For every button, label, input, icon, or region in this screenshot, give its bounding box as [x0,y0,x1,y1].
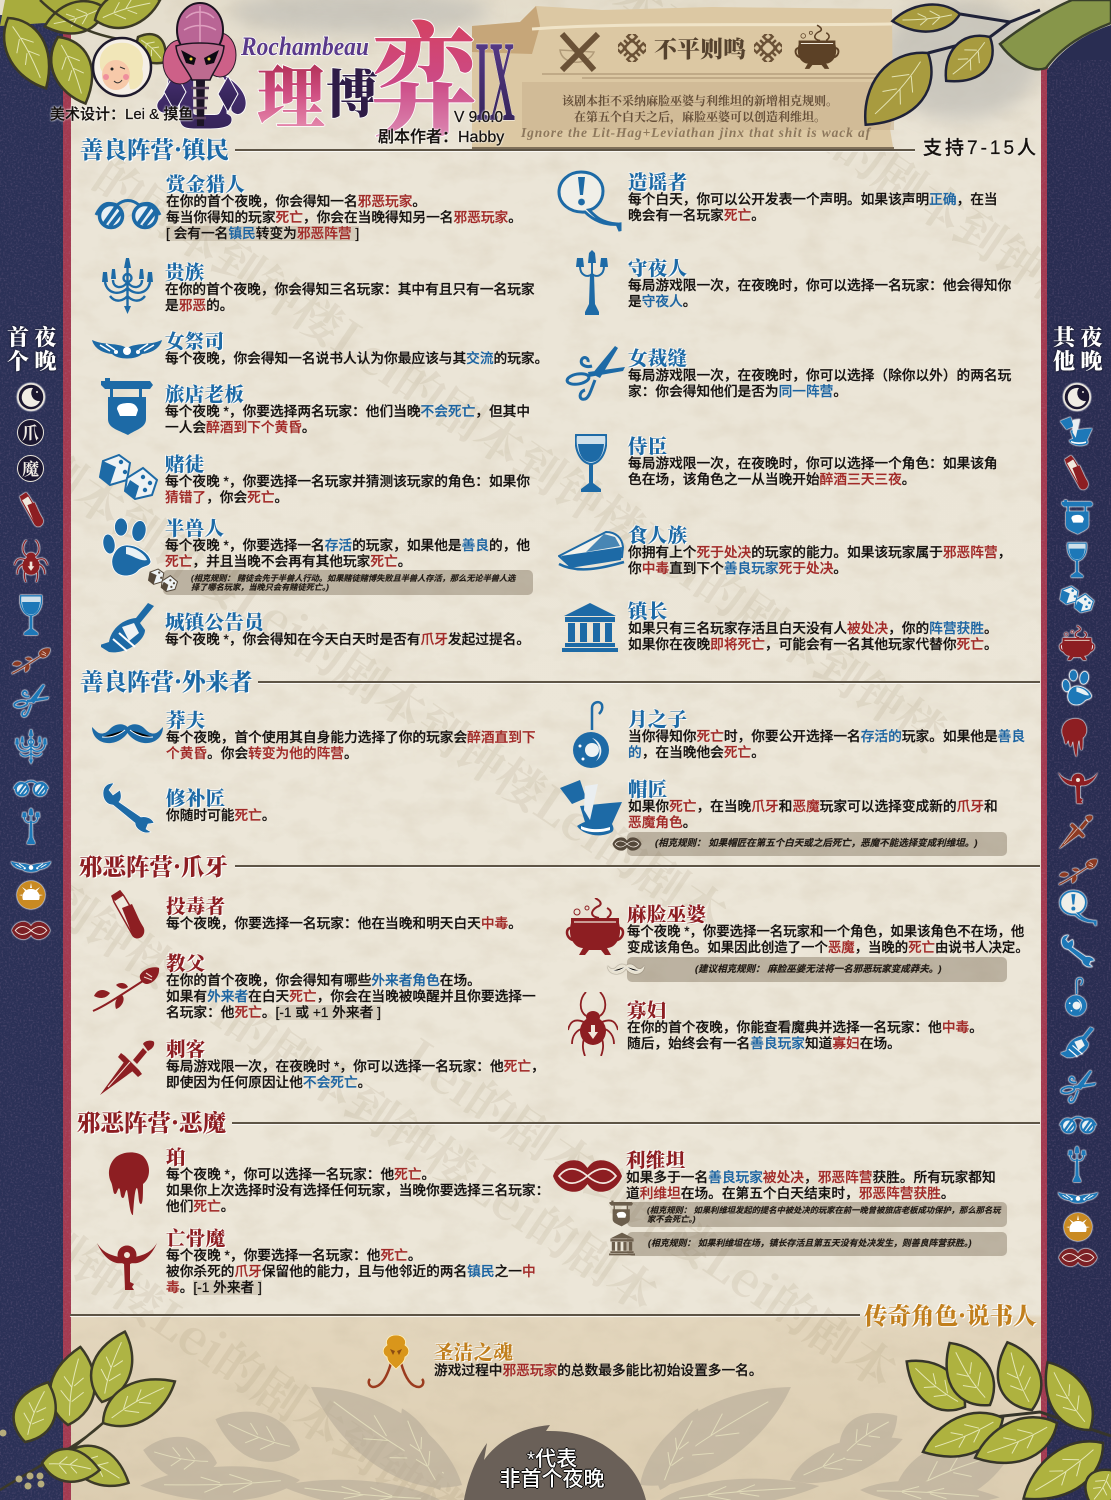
role text [166,896,522,932]
section heading: demons: 邪恶阵营·恶魔 [77,1104,226,1138]
role text: 修补匠 [166,783,225,811]
role text: 城镇公告员 [165,607,264,635]
role: 帽匠 [560,779,1010,857]
icon: winged skull key [97,1235,157,1290]
role text [628,436,998,488]
role: 教父 [92,953,537,1021]
role text: 如果只有三名玩家存活且白天没有人被处决，你的阵营获胜。 [628,621,998,636]
role text [628,258,1011,310]
role text: 贵族 [165,257,205,285]
player count: 支持7-15人 [923,138,1039,159]
icon: designer avatar [92,36,152,98]
role text: 每个夜晚，你会得知一名说书人认为你最应该与其交流的玩家。 [165,351,548,366]
credit: script author: 剧本作者：Habby [378,129,504,146]
role: 女裁缝 [565,346,1020,402]
icon: winged band [92,340,162,358]
minion token [17,419,44,446]
role text: 猜错了，你会死亡。 [165,490,288,505]
role: 利维坦 [553,1150,1008,1258]
icon: vial [110,890,147,940]
text: IX [475,18,515,146]
logo: Rochambeau title [155,0,515,160]
role text [627,904,1029,956]
role: 守夜人 [574,250,1014,315]
role text [166,1147,549,1215]
role text: 半兽人 [165,513,224,541]
role text: 是邪恶的。 [165,298,233,313]
role text [165,518,530,570]
role text: 每个夜晚 *，你要选择两名玩家：他们当晚不会死亡，但其中 [165,404,530,419]
role: 城镇公告员 [101,603,541,655]
role text: 你中毒直到下个善良玩家死于处决。 [628,561,847,576]
moon token [17,383,45,411]
role text [166,788,276,824]
role text: 帽匠 [628,774,668,802]
role text: 每个夜晚，首个使用其自身能力选择了你的玩家会醉酒直到下 [166,730,536,745]
icon: speech bubble [557,170,622,232]
role: 麻脸巫婆 [565,898,1020,983]
jinx note: innkeeper: (相克规则： 如果利维坦发起的提名中被处决的玩家在前一晚曾被旅店老板成功保护，那么那名玩 [647,1205,1001,1215]
demon token: 魔 [22,455,39,480]
role: 半兽人 [102,513,533,595]
role text [626,1150,996,1202]
icon: small dice [148,568,178,592]
role text [164,379,530,435]
icon: small moustache [607,963,645,975]
role: 侍臣 [575,433,1020,493]
jinx note: leviathan: (相克规则： 如果帽匠在第五个白天或之后死亡，恶魔不能选择变成利维坦。) [655,838,977,849]
role text: 投毒者 [166,891,225,919]
sidebar heading: 首 夜 个 晚 [7,321,56,376]
icon: street lamp [574,250,610,315]
banner description: 该剧本拒不采纳麻脸巫婆与利维坦的新增相克规则。 [562,92,838,109]
section heading: townsfolk: 善良阵营·镇民 [80,131,229,165]
role text: 你随时可能死亡。 [166,808,276,823]
role text: [ 会有一名镇民转变为邪恶阵营 ] [166,226,359,241]
logo: 理博 characters: 理 [257,45,325,142]
icon: small knot [612,836,642,852]
role text: 每个夜晚 *，你要选择一名玩家和一个角色，如果该角色不在场，他 [627,924,1024,939]
text: 传奇角色·说书人 [864,1297,1036,1331]
role text: 食人族 [628,520,687,548]
banner script line: Ignore the Lit-Hag+Leviathan jinx that shit is wack af [521,125,871,140]
jinx note: gambler [163,570,533,595]
role text [166,953,536,1021]
role: 贵族 [102,257,535,314]
role text: 旅店老板 [165,379,244,407]
role text: 赏金猎人 [166,169,245,197]
role text: 个黄昏。你会转变为他的阵营。 [166,746,358,761]
icon: knot left [618,34,646,62]
role text: 晚会有一名玩家死亡。 [628,208,765,223]
banner title: 不平则鸣 [654,31,746,64]
role: 造谣者 [557,170,1007,232]
icon: scissors [565,346,625,402]
role: 月之子 [572,700,1027,770]
role text: 造谣者 [628,167,687,195]
role text: 毒。[-1 外来者 ] [166,1280,262,1295]
jinx note: innkeeper [627,1202,1007,1227]
role text [434,1342,763,1379]
role text: 莽夫 [166,705,206,733]
panel: parchment banner 不平则鸣 [472,6,894,149]
role text: 利维坦 [626,1145,685,1173]
icon: chandelier [102,258,153,314]
role text: 恶魔角色。 [628,815,696,830]
demon token [17,455,44,482]
role text: 寡妇 [627,995,667,1023]
role text: 道利维坦在场。在第五个白天结束时，邪恶阵营获胜。 [626,1186,955,1201]
role: 修补匠 [102,783,302,833]
night order icons [0,490,63,950]
credit: art design: 美术设计：Lei & 摸鱼 [50,106,193,123]
role text: 当你得知你死亡时，你要公开选择一名存活的玩家。如果他是善良 [628,729,1025,744]
footnote [452,1450,652,1490]
icon: bell [101,603,155,655]
role text: 每局游戏限一次，在夜晚时，你可以选择一个角色：如果该角 [628,456,998,471]
role text: 侍臣 [628,431,668,459]
role: 食人族 [558,525,1003,577]
role text: 赌徒 [165,449,205,477]
role text [628,348,1011,400]
role text: 随后，始终会有一名善良玩家知道寡妇在场。 [627,1036,901,1051]
role text: 镇长 [628,596,668,624]
role text: 在你的首个夜晚，你会得知有哪些外来者角色在场。 [166,973,481,988]
watermark: diagonal repeated text: 的剧本到钟楼Lei的剧本到钟楼Lei的剧本到钟楼 [81,140,961,764]
logo: skull with brain and roses [163,3,236,126]
icon: moustache [92,722,163,745]
role text: 珀 [166,1142,186,1170]
role text [166,710,536,762]
role text: 每局游戏限一次，在夜晚时 *，你可以选择一名玩家：他死亡， [166,1059,545,1074]
role text: 刺客 [166,1034,206,1062]
role text [166,1228,536,1296]
icon: small temple [609,1231,635,1257]
logo: big 心 character: 心 [155,19,262,151]
role text: 女裁缝 [628,343,687,371]
role: 镇长 [562,601,1027,653]
icon: crossed-out teapot [559,32,600,72]
role text: 如果有外来者在白天死亡，你会在当晚被唤醒并且你要选择一 [166,989,536,1004]
role text: 每当你得知的玩家死亡，你会在当晚得知另一名邪恶玩家。 [166,210,522,225]
logo: 理博 characters [257,45,378,142]
footnote: *代表 [527,1448,577,1471]
role text: 教父 [166,948,206,976]
role text: 女祭司 [165,326,224,354]
role text: 如果多于一名善良玩家被处决，邪恶阵营获胜。所有玩家都知 [626,1170,996,1185]
role text: 一人会醉酒到下个黄昏。 [165,420,316,435]
role: 投毒者 [110,890,530,940]
moon token [1063,383,1091,411]
role text: 月之子 [628,704,687,732]
section heading: outsiders: 善良阵营·外来者 [80,663,252,697]
icon: brown cauldron [794,24,840,69]
icon: golden mask [367,1335,425,1395]
icon: goblet [575,433,607,493]
banner description: 在第五个白天之后，麻脸巫婆可以创造利维坦。 [574,108,826,124]
role text: 家：你会得知他们是否为同一阵营。 [628,384,847,399]
role text: 被你杀死的爪牙保留他的能力，且与他邻近的两名镇民之一中 [166,1264,536,1279]
role: 刺客 [100,1039,535,1095]
icon: wrench [102,783,155,833]
role text [164,326,548,366]
role text: 每个夜晚，你要选择一名玩家：他在当晚和明天白天中毒。 [166,916,522,931]
jinx note: innkeeper: 家不会死亡。) [647,1214,695,1224]
role text: 是守夜人。 [628,294,696,309]
icon: top hat [560,780,625,838]
icon: temple [562,603,618,652]
icon: rose [92,967,160,1012]
role text: 他们死亡。 [166,1199,234,1214]
banner background shape [472,6,894,149]
role text: 名玩家：他死亡。[-1 或 +1 外来者 ] [166,1005,381,1020]
footnote: 非首个夜晚 [500,1468,604,1491]
role text [628,601,998,653]
jinx note: gambler: (相克规则： 赌徒会先于半兽人行动。如果赌徒赌博失败且半兽人存活，那么无论半兽人选 [191,574,515,583]
logo: 理博 characters: 博 [326,53,378,128]
icon: paw [102,518,152,576]
role text: 每个夜晚 *，你要选择一名存活的玩家，如果他是善良的，他 [165,538,530,553]
role text: 的，在当晚他会死亡。 [628,745,765,760]
jinx note: gambler: 择了哪名玩家，当晚只会有赌徒死亡。) [191,583,329,592]
role text: 在你的首个夜晚，你会得知一名邪恶玩家。 [166,194,426,209]
role text [628,709,1025,761]
role text: 你拥有上个死于处决的玩家的能力。如果该玩家属于邪恶阵营， [628,545,1011,560]
role: 珀 [107,1147,542,1215]
role text [166,169,522,242]
icon: pie [558,530,625,572]
role text [628,779,998,831]
role text: 麻脸巫婆 [627,899,706,927]
role text [164,257,535,313]
divider and section heading: fabled [70,1314,860,1316]
role: 寡妇 [568,992,968,1056]
role text: 每个夜晚 *，你要选择一名玩家并猜测该玩家的角色：如果你 [165,474,530,489]
jinx note: suggested: (建议相克规则： 麻脸巫婆无法将一名邪恶玩家变成莽夫。) [695,964,941,975]
role text: 圣洁之魂 [434,1337,513,1365]
icon: blood blot [107,1150,150,1215]
role: 女祭司 [92,326,548,366]
role: 亡骨魔 [97,1228,542,1296]
watermark: diagonal repeated text: Lei的剧本到钟楼Lei的剧本 [391,1020,913,1403]
role text [164,449,530,505]
minion token: 爪 [22,419,39,444]
role: 莽夫 [92,710,542,762]
sidebar heading: 其 夜 他 晚 [1053,321,1102,376]
section heading: minions: 邪恶阵营·爪牙 [79,848,228,882]
role: 圣洁之魂 [367,1335,767,1395]
logo: Rochambeau wordmark: Rochambeau [240,32,369,61]
role text: 每个夜晚 *，你会得知在今天白天时是否有爪牙发起过提名。 [165,632,530,647]
role text: 色在场，该角色之一从当晚开始醉酒三天三夜。 [628,472,915,487]
role text: 每个白天，你可以公开发表一个声明。如果该声明正确，在当 [628,192,998,207]
icon: knot right [754,34,782,62]
icon: dagger [100,1040,155,1095]
sidebar: other nights order [1048,320,1111,1275]
role text: 每局游戏限一次，在夜晚时，你可以选择一名玩家：他会得知你 [628,278,1011,293]
role text: 每个夜晚 *，你要选择一名玩家：他死亡。 [166,1248,422,1263]
icon: spider [568,992,618,1056]
icon: knot [553,1157,622,1195]
role text: 游戏过程中邪恶玩家的总数最多能比初始设置多一名。 [434,1363,763,1378]
role text: 守夜人 [628,253,687,281]
night order icons [1048,415,1111,1275]
role text: 在你的首个夜晚，你会得知三名玩家：其中有且只有一名玩家 [165,282,535,297]
icon: dice [99,454,158,500]
role text: 如果你上次选择时没有选择任何玩家，当晚你要选择三名玩家： [166,1183,549,1198]
icon: moon pendant [572,700,610,770]
jinx note: leviathan [627,832,1007,856]
role text [628,172,998,224]
role: 旅店老板 [101,378,530,435]
jinx note: mayor: (相克规则： 如果利维坦在场，镇长存活且第五天没有处决发生，则善良阵营获胜。) [648,1238,971,1248]
jinx note: suggested [627,957,1007,982]
banner description [562,92,838,124]
role text: 在你的首个夜晚，你能查看魔典并选择一名玩家：他中毒。 [627,1020,983,1035]
role text: 即使因为任何原因让他不会死亡。 [166,1075,371,1090]
role text [166,1039,545,1091]
icon: inn sign [101,378,153,435]
role text [165,612,530,648]
version: V 9.0.0 [454,109,503,126]
role text: 死亡，并且当晚不会再有其他玩家死亡。 [165,554,411,569]
role: 赏金猎人 [94,169,522,242]
role text [627,1000,983,1052]
icon: small inn sign [609,1200,633,1227]
role text: 每个夜晚 *，你可以选择一名玩家：他死亡。 [166,1167,435,1182]
role text: 如果你在夜晚即将死亡，可能会有一名其他玩家代替你死亡。 [628,637,998,652]
role text: 如果你死亡，在当晚爪牙和恶魔玩家可以选择变成新的爪牙和 [628,799,998,814]
role text [628,525,1011,577]
role text: 亡骨魔 [166,1223,225,1251]
role text: 每局游戏限一次，在夜晚时，你可以选择（除你以外）的两名玩 [628,368,1011,383]
jinx note: mayor [627,1232,1007,1256]
role: 赌徒 [99,449,530,505]
sidebar: first night order [0,320,63,950]
icon: cauldron [565,898,625,955]
role text: 变成该角色。如果因此创造了一个恶魔，当晚的死亡由说书人决定。 [627,940,1029,955]
icon: glasses [94,199,162,230]
